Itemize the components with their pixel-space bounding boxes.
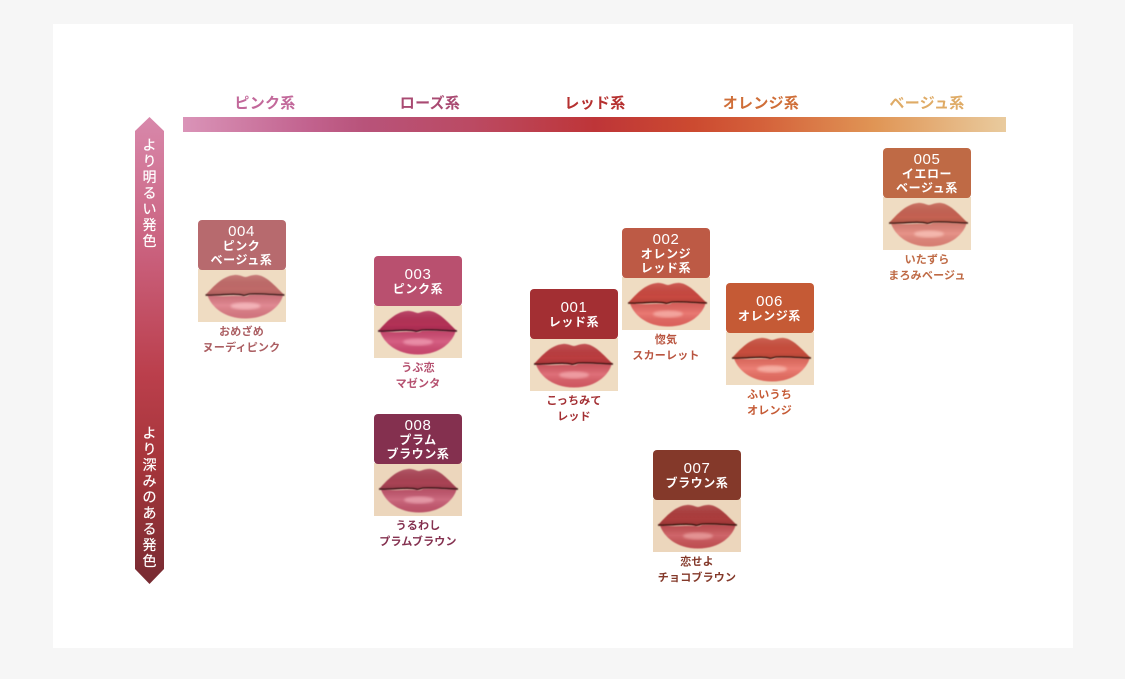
shade name: チョコブラウン	[658, 572, 736, 584]
label: brighter: 色	[142, 233, 156, 249]
swatch label: 003	[405, 266, 431, 283]
heading: rose: ローズ系	[400, 94, 460, 112]
swatch label	[653, 450, 741, 500]
swatch label	[374, 414, 462, 464]
swatch label	[374, 256, 462, 306]
shade name	[747, 389, 792, 416]
swatch label	[198, 220, 286, 270]
card: 008	[374, 414, 462, 548]
lips photo	[374, 463, 462, 516]
shade name: マゼンタ	[396, 378, 440, 390]
lips photo	[653, 499, 741, 552]
swatch label	[883, 148, 971, 198]
label: brighter	[142, 137, 156, 249]
shade name: プラムブラウン	[379, 536, 457, 548]
label: brighter: り	[142, 153, 156, 169]
shade name: ふいうち	[747, 389, 792, 401]
swatch label: レッド系	[549, 315, 599, 329]
shade name: うるわし	[396, 520, 440, 532]
shade name: いたずら	[905, 254, 949, 266]
shade name: おめざめ	[219, 326, 264, 338]
card: 006	[726, 283, 814, 416]
shade name	[658, 556, 736, 584]
shade name: オレンジ	[747, 404, 792, 416]
label: deeper: り	[142, 441, 156, 457]
shade name	[203, 325, 280, 354]
arrow shape	[135, 117, 164, 584]
label: deeper: よ	[142, 425, 156, 441]
label: deeper: 色	[142, 553, 156, 569]
swatch label: ブラウン系	[386, 447, 450, 461]
swatch label: ベージュ系	[896, 181, 958, 195]
card: 005	[883, 148, 971, 282]
vertical brightness arrow	[135, 117, 164, 584]
shade name: まろみベージュ	[888, 270, 966, 282]
label: deeper: る	[142, 521, 156, 537]
heading: orange: オレンジ系	[723, 94, 799, 112]
heading: beige: ベージュ系	[889, 94, 965, 112]
swatch label	[726, 283, 814, 333]
card: 004	[198, 220, 286, 354]
swatch label: イエロー	[902, 167, 952, 181]
label: brighter: よ	[142, 137, 156, 153]
swatch label: ブラウン系	[665, 476, 728, 490]
label: deeper: み	[142, 473, 156, 489]
lips photo	[374, 305, 462, 358]
lips photo	[883, 197, 971, 250]
shade name	[396, 362, 440, 390]
swatch label: 004	[228, 223, 255, 240]
swatch label: オレンジ系	[738, 309, 801, 323]
label: brighter: 発	[142, 217, 156, 233]
swatch label: 006	[756, 293, 783, 310]
label: brighter: 明	[142, 169, 156, 185]
label: brighter: る	[142, 185, 156, 201]
heading: red: レッド系	[564, 94, 626, 112]
shade name: スカーレット	[632, 350, 700, 362]
swatch label: 005	[914, 151, 940, 168]
swatch label: レッド系	[641, 261, 691, 275]
card: 003	[374, 256, 462, 390]
card: 007	[653, 450, 741, 584]
lips photo	[726, 332, 814, 385]
shade name: うぶ恋	[401, 362, 435, 374]
label: brighter: い	[142, 201, 156, 217]
lips photo	[530, 338, 618, 391]
heading: pink: ピンク系	[234, 94, 296, 112]
swatch label: オレンジ	[641, 247, 691, 261]
shade name: ヌーディピンク	[203, 342, 280, 354]
label: deeper: あ	[142, 505, 156, 521]
label: deeper: の	[142, 489, 156, 505]
swatch label: ベージュ系	[211, 253, 272, 267]
shade name	[379, 520, 457, 548]
shade name	[546, 395, 602, 422]
swatch label: ピンク	[223, 239, 260, 253]
swatch label: ピンク系	[393, 282, 443, 296]
label: deeper	[142, 425, 156, 569]
swatch label: 007	[684, 460, 710, 477]
swatch label: 001	[561, 299, 587, 316]
shade name: 恋せよ	[680, 556, 714, 568]
shade name: 惚気	[655, 334, 677, 346]
card: 001	[530, 289, 618, 422]
shade name	[888, 254, 966, 282]
lips photo	[198, 269, 286, 322]
swatch label: プラム	[399, 433, 437, 447]
shade name: レッド	[557, 410, 591, 422]
horizontal hue gradient bar	[183, 117, 1006, 132]
card: 002	[622, 228, 710, 362]
label: deeper: 発	[142, 537, 156, 553]
swatch label: 002	[653, 231, 679, 248]
shade name: こっちみて	[546, 395, 602, 407]
swatch label	[622, 228, 710, 278]
label: deeper: 深	[142, 457, 156, 473]
swatch label	[530, 289, 618, 339]
swatch label: 008	[405, 417, 431, 434]
lips photo	[622, 277, 710, 330]
shade name	[632, 334, 700, 362]
